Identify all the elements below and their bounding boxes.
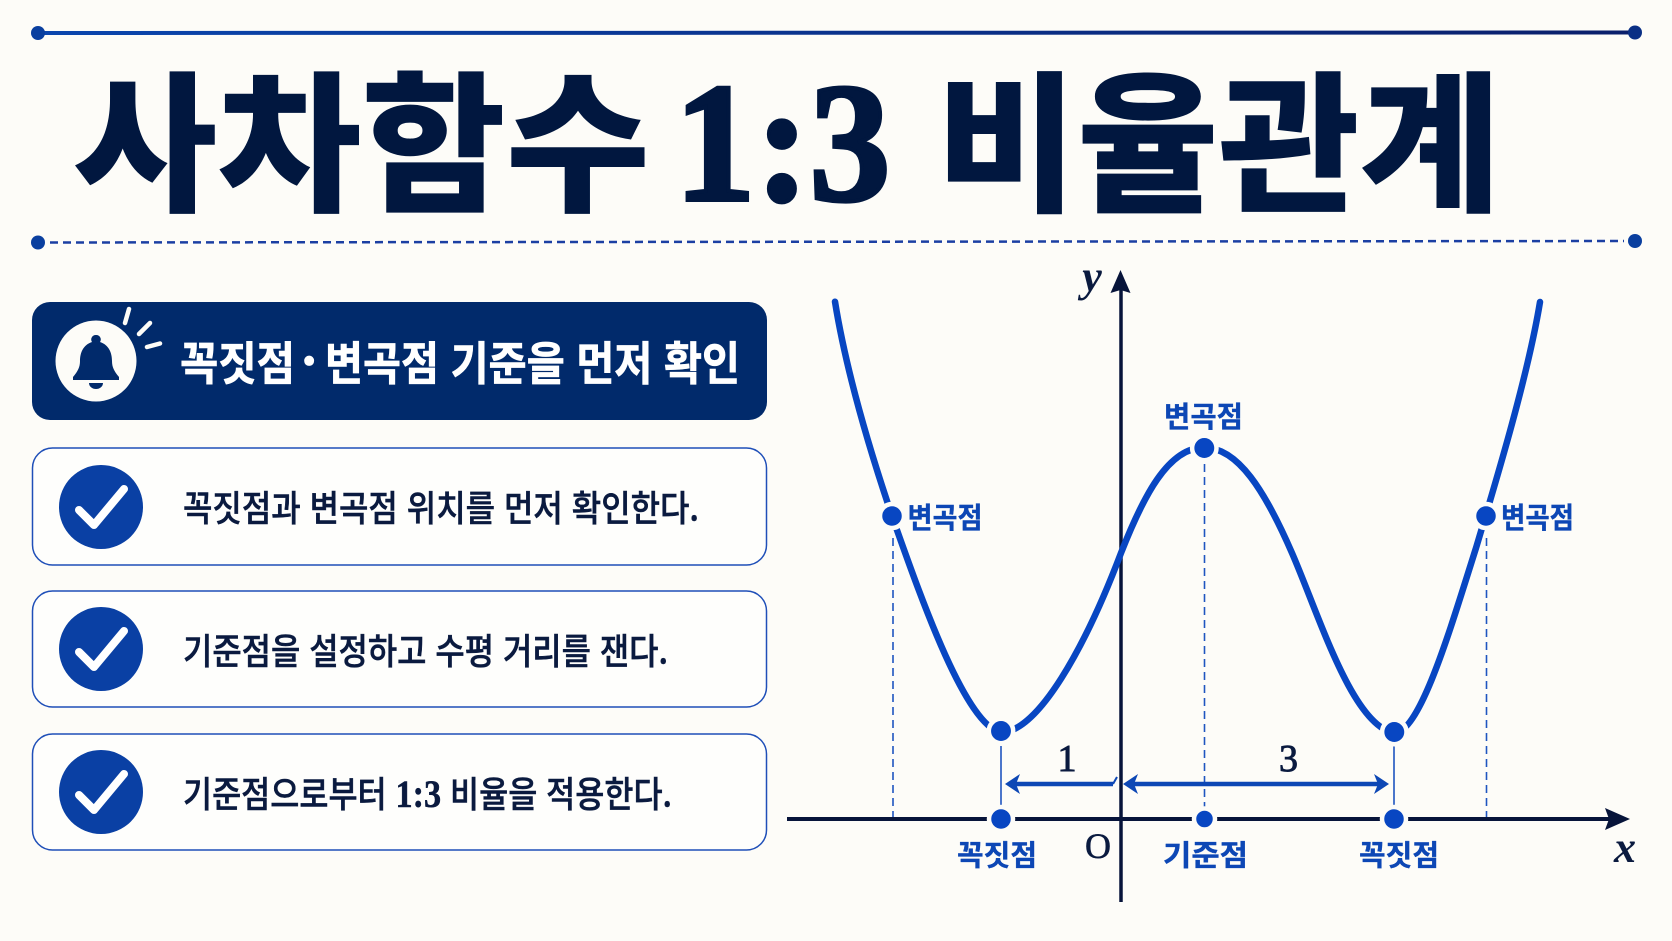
- point labels: [908, 394, 1574, 874]
- point labels: 변곡점: [1501, 495, 1574, 537]
- axis labels: O: [1085, 826, 1111, 866]
- panel: alert banner: [32, 302, 767, 420]
- banner text: ·: [301, 323, 317, 395]
- icon: check 3: [59, 750, 143, 834]
- panel: step 1: [32, 448, 766, 565]
- chart: quartic function graph: [787, 252, 1636, 902]
- step 2 text: 기준점을 설정하고 수평 거리를 잰다.: [183, 623, 668, 675]
- distance arrow: 1: [1005, 774, 1117, 794]
- panel: step 2: [32, 591, 766, 707]
- x axis: [787, 808, 1630, 830]
- point labels: 기준점: [1163, 832, 1248, 874]
- distance arrow: 3: [1123, 774, 1389, 794]
- step 1 text: 꼭짓점과 변곡점 위치를 먼저 확인한다.: [183, 480, 699, 532]
- point labels: 변곡점: [1164, 394, 1243, 436]
- points: [880, 436, 1498, 831]
- point labels: 꼭짓점: [1359, 832, 1439, 874]
- title: 비율관계: [936, 24, 1501, 244]
- vertical dashed guides: [893, 464, 1486, 817]
- icon: check 2: [59, 607, 143, 691]
- title: 1:3: [674, 49, 890, 237]
- top rule with end dots: [31, 26, 1642, 40]
- banner text: 꼭짓점: [180, 328, 295, 394]
- icon: bell: [56, 309, 160, 402]
- ratio label 3: 3: [1279, 738, 1298, 780]
- axis labels: [1077, 252, 1636, 872]
- banner text: [180, 323, 740, 395]
- banner text: 변곡점 기준을 먼저 확인: [325, 328, 740, 394]
- ratio label 1: 1: [1058, 738, 1076, 780]
- point labels: 변곡점: [908, 495, 982, 537]
- panel: step 3: [32, 734, 766, 850]
- axis labels: y: [1077, 252, 1102, 301]
- quartic curve: [835, 302, 1540, 733]
- step 3 text: 기준점으로부터 1:3 비율을 적용한다.: [183, 766, 672, 818]
- axis labels: x: [1613, 823, 1636, 872]
- title: 사차함수: [73, 24, 650, 244]
- icon: check 1: [59, 465, 143, 549]
- title: [73, 24, 1501, 244]
- dashed rule with end dots: [31, 234, 1642, 250]
- point labels: 꼭짓점: [957, 832, 1037, 874]
- y axis: [1110, 270, 1130, 902]
